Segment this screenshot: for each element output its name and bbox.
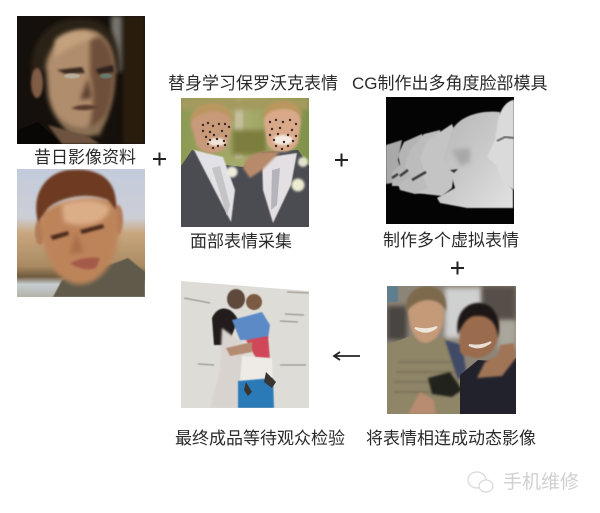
- plus sign 2: [335, 154, 348, 166]
- heading: CG face models: CG制作出多角度脸部模具: [352, 74, 548, 93]
- watermark: phone repair account: 手机维修: [503, 471, 579, 493]
- photo: facial expression capture, two men in suits: [181, 98, 309, 227]
- plus sign 3: [451, 262, 464, 274]
- plus sign 1: [153, 152, 166, 166]
- image: row of CG head models: [386, 97, 514, 224]
- photo: stunt actor and colleague: [387, 286, 516, 414]
- watermark: phone repair account: [468, 471, 579, 493]
- caption: expressions linked into moving image: 将表情相连成动态影像: [366, 429, 536, 448]
- caption: facial expression capture: 面部表情采集: [190, 232, 292, 251]
- photo: archive portrait, smiling face: [17, 169, 145, 297]
- caption: final product awaits audience: 最终成品等待观众检验: [175, 429, 345, 448]
- photo: final result, family on beach: [181, 281, 309, 408]
- caption: virtual expressions: 制作多个虚拟表情: [383, 231, 519, 250]
- caption: archive footage: 昔日影像资料: [34, 148, 136, 167]
- photo: archive portrait, stern face: [17, 16, 145, 144]
- heading: stand-in learns expressions: 替身学习保罗沃克表情: [168, 74, 338, 93]
- icon: chat bubbles: [468, 472, 493, 492]
- arrow: pointing to final result: [334, 352, 360, 360]
